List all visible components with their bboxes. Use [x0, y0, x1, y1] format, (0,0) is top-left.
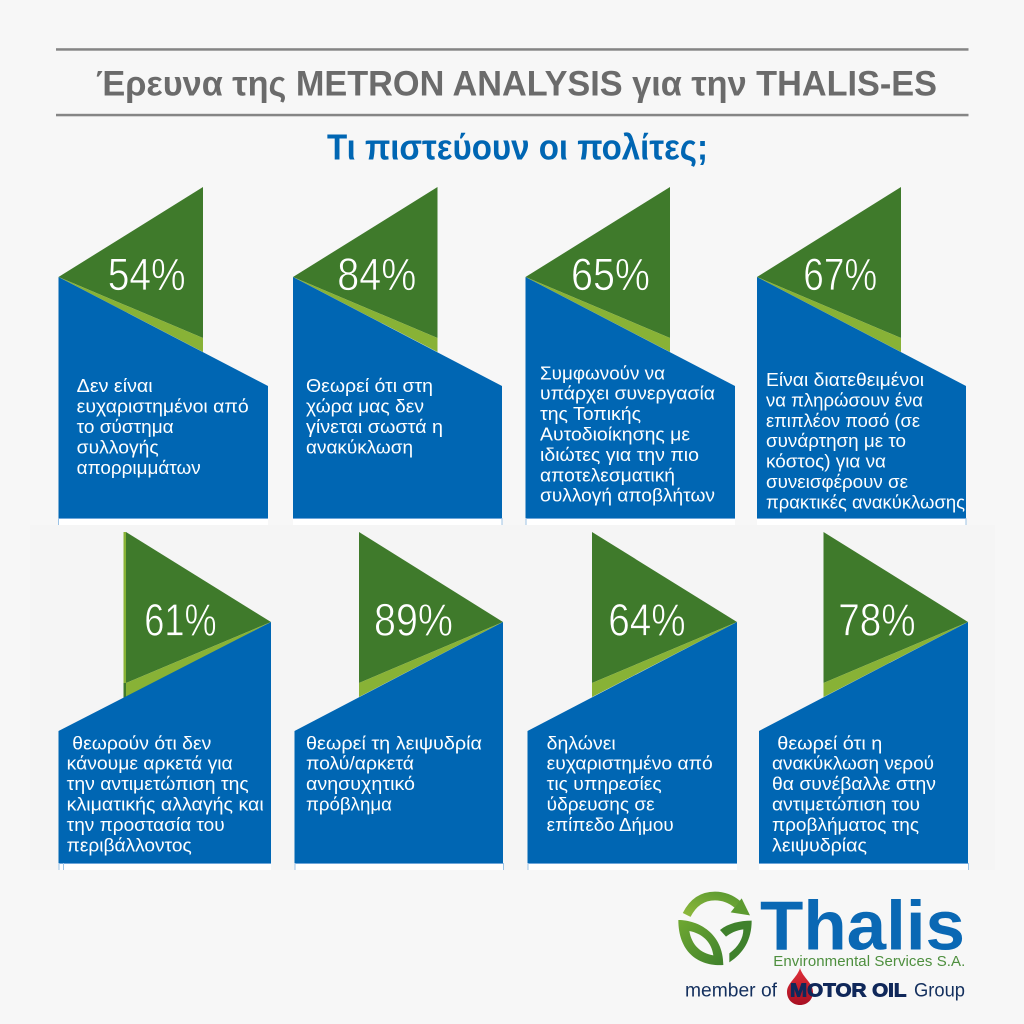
description: πρακτικές ανακύκλωσης	[766, 491, 965, 512]
blue body	[528, 622, 737, 863]
blue body	[58, 622, 271, 863]
green triangle	[757, 187, 901, 338]
description: ύδρευσης σε	[547, 794, 655, 814]
description: δηλώνει	[547, 732, 616, 753]
description: αντιμετώπιση του	[772, 794, 920, 814]
description: Αυτοδιοίκησης με	[540, 424, 690, 444]
blue body	[759, 622, 968, 863]
description: Είναι διατεθειμένοι	[766, 369, 924, 390]
panel: 61%	[58, 532, 271, 870]
description: την προστασία του	[67, 814, 225, 835]
panel: 54%	[58, 187, 268, 525]
description: θεωρεί ότι η	[777, 732, 882, 753]
description: περιβάλλοντος	[67, 834, 192, 855]
light green wedge	[592, 622, 737, 697]
description: συνεισφέρουν σε	[766, 471, 908, 492]
description: να πληρώσουν ένα	[766, 389, 923, 410]
blue body	[526, 277, 735, 518]
description: θεωρεί τη λειψυδρία	[306, 732, 482, 753]
green triangle	[58, 187, 203, 338]
dark green notch	[124, 683, 126, 698]
logo: Thalis Environmental Services	[678, 886, 965, 1005]
green triangle	[126, 532, 271, 683]
light green wedge	[757, 277, 901, 352]
description: κόστος) για να	[766, 451, 886, 472]
description: ευχαριστημένο από	[547, 753, 713, 774]
description: θα συνέβαλλε στην	[772, 773, 936, 794]
Motor Oil name: MOTOR OIL	[790, 980, 906, 1001]
description: χώρα μας δεν	[306, 396, 424, 416]
member of label: member of	[685, 981, 778, 1002]
description	[766, 369, 965, 512]
description: τις υπηρεσίες	[547, 773, 662, 794]
description: ανησυχητικό	[306, 773, 415, 794]
green triangle	[359, 532, 503, 683]
light green wedge	[824, 622, 968, 697]
description: υπάρχει συνεργασία	[540, 383, 715, 404]
light green wedge	[359, 622, 503, 697]
description: ευχαριστημένοι από	[77, 396, 249, 416]
light green wedge	[58, 277, 203, 352]
description: Συμφωνούν να	[540, 362, 665, 383]
description: ανακύκλωση	[306, 436, 413, 458]
subtitle: Τι πιστεύουν οι πολίτες;	[327, 126, 708, 167]
description: συλλογής	[77, 436, 159, 458]
green triangle	[592, 532, 737, 683]
panel: 89%	[294, 532, 504, 870]
description	[540, 362, 715, 506]
wordmark: Thalis	[760, 886, 965, 964]
description: πολύ/αρκετά	[306, 753, 414, 774]
light green wedge	[293, 277, 438, 352]
description: λειψυδρίας	[772, 834, 867, 855]
light green wedge	[526, 277, 670, 352]
panel: 78%	[759, 532, 969, 870]
icon: recycling leaves	[678, 896, 752, 965]
blue body	[293, 277, 502, 518]
description: απορριμμάτων	[77, 457, 201, 478]
description: προβλήματος της	[772, 814, 919, 835]
description: ανακύκλωση νερού	[772, 753, 934, 774]
light green wedge	[124, 532, 271, 698]
percentage: 78%	[838, 595, 916, 646]
green triangle	[293, 187, 438, 338]
description: της Τοπικής	[540, 403, 641, 424]
description: την αντιμετώπιση της	[67, 773, 249, 794]
blue body	[294, 622, 503, 863]
panel: 84%	[293, 187, 502, 525]
description: επίπεδο Δήμου	[547, 814, 674, 835]
percentage: 67%	[803, 249, 877, 300]
green triangle	[824, 532, 968, 683]
description	[306, 375, 443, 458]
description: αποτελεσματική	[540, 464, 675, 485]
description: Δεν είναι	[77, 375, 153, 396]
description: πρόβλημα	[306, 794, 392, 814]
percentage: 65%	[571, 249, 650, 300]
description: συλλογή αποβλήτων	[540, 485, 715, 506]
description	[77, 375, 249, 478]
panel: 67%	[757, 187, 966, 525]
tagline: Environmental Services S.A.	[773, 953, 965, 970]
description: κλιματικής αλλαγής και	[67, 794, 264, 814]
description	[67, 732, 264, 855]
description: συνάρτηση με το	[766, 430, 906, 451]
description	[306, 732, 482, 814]
Group label: Group	[914, 981, 965, 1002]
title: Έρευνα της METRON ANALYSIS για την THALIS-ES	[96, 65, 937, 104]
percentage: 61%	[144, 595, 217, 646]
percentage: 64%	[608, 595, 686, 646]
description	[547, 732, 713, 835]
description: θεωρούν ότι δεν	[72, 732, 211, 753]
description: γίνεται σωστά η	[306, 416, 443, 437]
description: ιδιώτες για την πιο	[540, 444, 699, 465]
panel: 65%	[526, 187, 735, 525]
description	[772, 732, 936, 855]
percentage: 89%	[374, 595, 453, 646]
description: Θεωρεί ότι στη	[306, 375, 433, 396]
panel: 64%	[528, 532, 737, 870]
icon: red oil drop	[787, 968, 813, 1005]
description: κάνουμε αρκετά για	[67, 753, 233, 774]
blue body	[58, 277, 268, 518]
green triangle	[526, 187, 670, 338]
percentage: 84%	[337, 249, 416, 300]
description: το σύστημα	[77, 416, 174, 437]
percentage: 54%	[108, 249, 186, 300]
description: επιπλέον ποσό (σε	[766, 410, 920, 431]
blue body	[757, 277, 966, 518]
